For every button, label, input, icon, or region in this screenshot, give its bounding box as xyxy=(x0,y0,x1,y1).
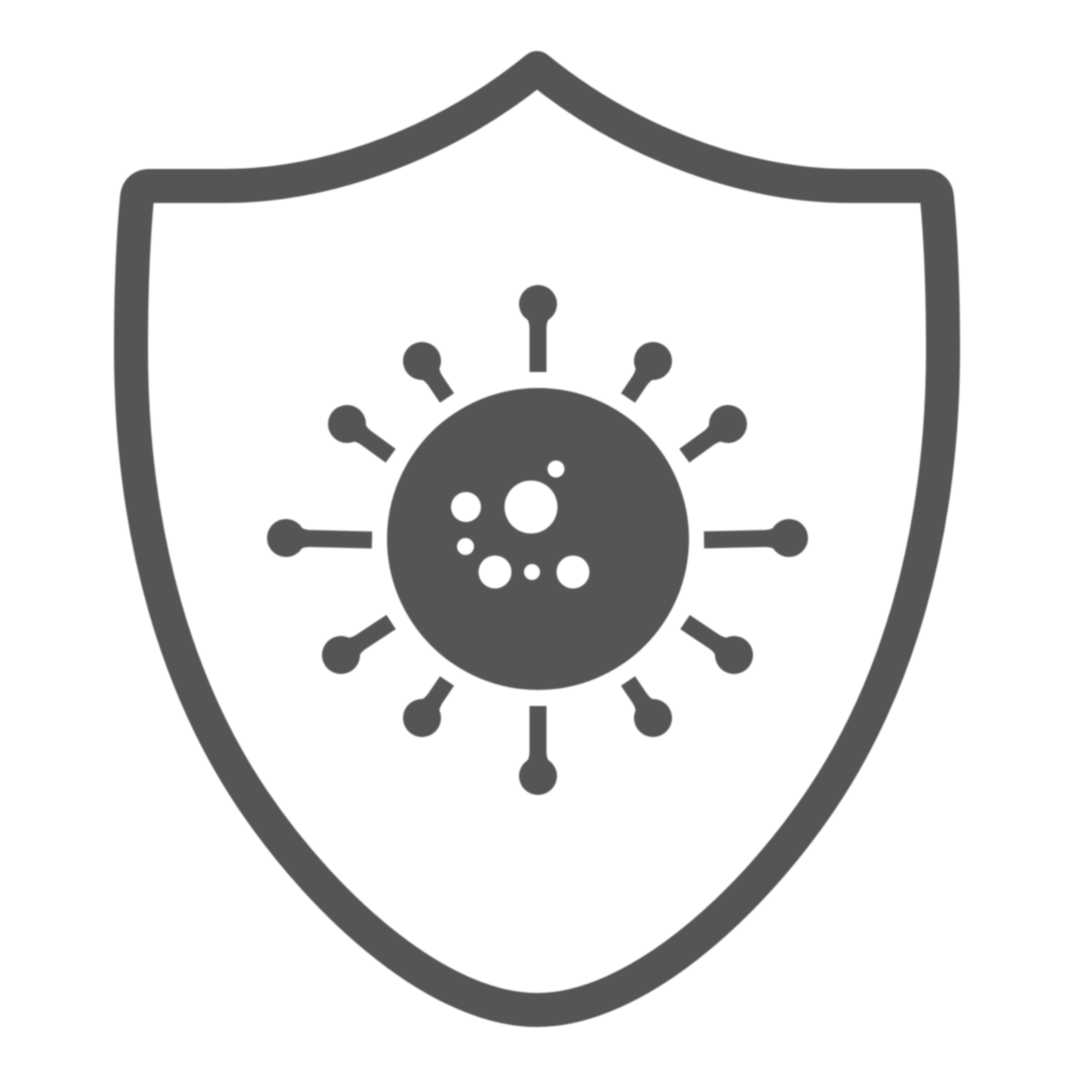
virus inner dots xyxy=(451,460,590,588)
virus xyxy=(267,285,808,795)
virus body xyxy=(387,388,689,690)
shield outline xyxy=(131,68,943,1010)
virus spikes xyxy=(267,285,808,795)
